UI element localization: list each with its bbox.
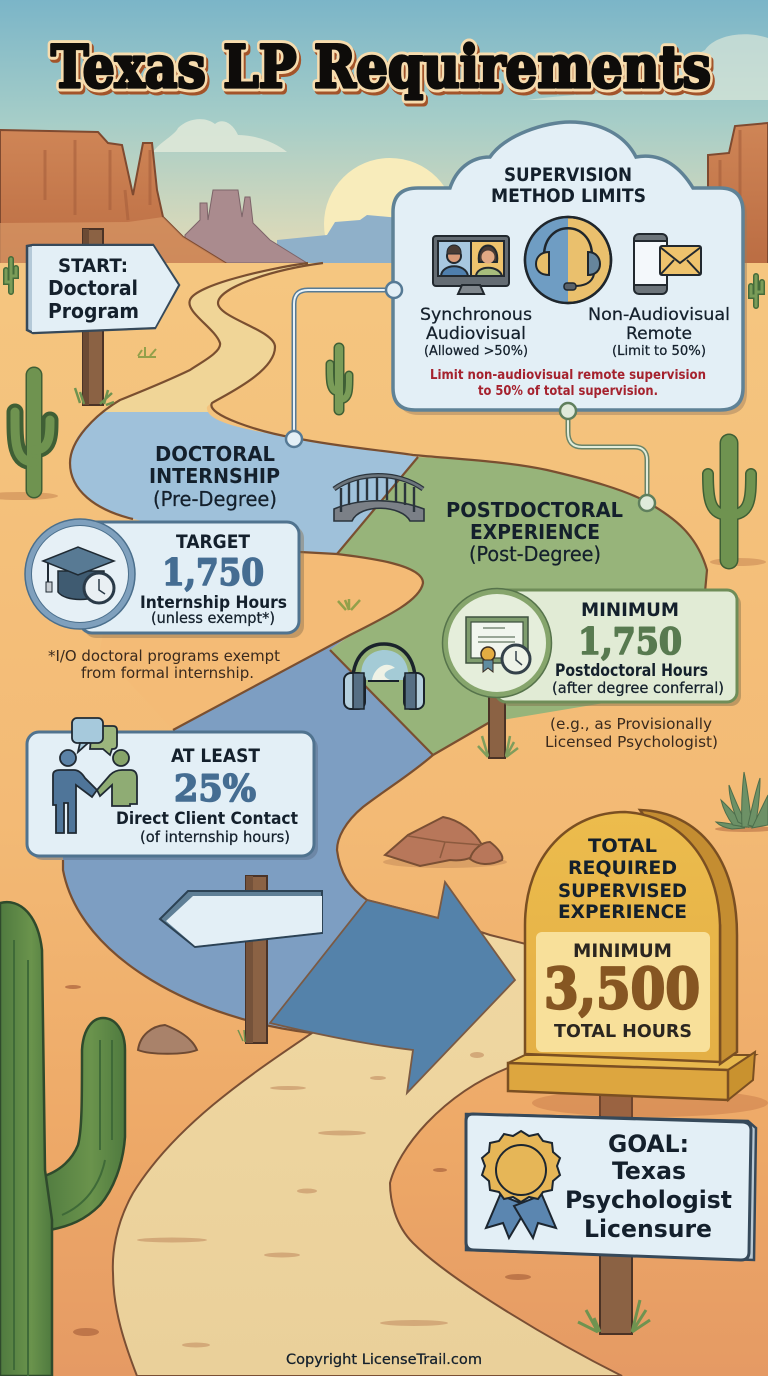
path: upper edge of green: [295, 438, 707, 592]
label: synchronous audiovisual: Synchronous: [420, 305, 532, 325]
path: lower internship section, blue: [63, 635, 433, 1033]
heading: supervision method limits: SUPERVISION: [504, 164, 632, 186]
icon: rock left: [138, 1025, 197, 1054]
label: synchronous audiovisual: (Allowed >50%): [424, 344, 528, 359]
panel: minimum postdoctoral hours: [442, 588, 741, 706]
text: total heading: [558, 835, 687, 923]
text: target stat: [140, 531, 287, 627]
connector inner green line: [568, 415, 647, 498]
path: internship section, light blue: [70, 412, 418, 554]
text: contact stat: Direct Client Contact: [116, 809, 298, 829]
heading: doctoral internship: (Pre-Degree): [153, 487, 277, 511]
path: orange sand patch: [100, 540, 423, 730]
background: setting sun: [324, 158, 456, 290]
icon: agave plant: [715, 772, 768, 832]
connector: supervision to postdoctoral: [568, 415, 647, 498]
text: goal: GOAL:: [608, 1130, 689, 1158]
background: left mesa: [0, 130, 227, 264]
heading: supervision method limits: METHOD LIMITS: [491, 185, 646, 207]
icon: grass tuft near start: [138, 347, 156, 357]
heading: postdoctoral experience: [446, 498, 623, 566]
callout: non-audiovisual limit: to 50% of total supervision.: [478, 384, 658, 399]
panel: 3,500 total hours: TOTAL HOURS: [554, 1021, 692, 1042]
sign: start doctoral program: START:: [58, 255, 128, 277]
panel: total required supervised experience: [508, 810, 768, 1117]
sign post: postdoctoral badge: [489, 690, 505, 758]
heading: doctoral internship: [149, 442, 280, 511]
background: central mesa: [185, 190, 307, 263]
text: goal: [565, 1130, 732, 1243]
text: postdoctoral stat: [552, 599, 724, 697]
icon: certificate with clock: [442, 588, 552, 698]
text: contact stat: (of internship hours): [140, 828, 290, 846]
connector dot: doctoral internship: [286, 431, 302, 447]
icon: bridge: [334, 475, 424, 521]
panel: direct client contact: [27, 718, 318, 860]
icon: award ribbon: [482, 1131, 560, 1238]
connector dot: postdoctoral: [639, 495, 655, 511]
background: desert sky: [0, 0, 768, 265]
path: lower sandy road: [113, 900, 622, 1376]
text: total heading: REQUIRED: [568, 857, 677, 879]
icon: small cactus far left: [6, 259, 16, 292]
heading: doctoral internship: DOCTORAL: [155, 442, 275, 466]
icon: grass at start post: [75, 388, 114, 405]
panel: 3,500 total hours: MINIMUM: [573, 940, 672, 962]
arrow: path toward total: [270, 882, 515, 1093]
icon: grass at arrow post: [238, 1030, 245, 1042]
panel: goal sign: [466, 1114, 756, 1260]
text: total heading: TOTAL: [588, 835, 657, 857]
sign post: start: [83, 229, 103, 405]
sign: start doctoral program: Doctoral: [48, 276, 138, 300]
footnote: I/O exemption: *I/O doctoral programs exempt: [48, 647, 280, 665]
note: provisionally licensed: (e.g., as Provisionally: [550, 715, 712, 733]
icon: grass tuft: [338, 599, 360, 610]
callout: non-audiovisual limit: Limit non-audiovisual remote supervision: [430, 368, 706, 383]
text: target stat: TARGET: [176, 531, 250, 553]
text: contact stat: [116, 745, 298, 846]
text: goal: Texas: [612, 1157, 686, 1185]
icon: cactus right: [708, 443, 766, 566]
sign: start doctoral program: Program: [48, 299, 139, 323]
heading: postdoctoral experience: POSTDOCTORAL: [446, 498, 623, 522]
text: target stat: (unless exempt*): [151, 609, 275, 627]
text: postdoctoral stat: (after degree conferral): [552, 679, 724, 697]
icon: rocks center: [383, 817, 507, 868]
path: winding upper road: [103, 263, 323, 412]
heading: postdoctoral experience: (Post-Degree): [469, 542, 601, 566]
label: synchronous audiovisual: Audiovisual: [426, 324, 526, 344]
text: target stat: 1,750: [162, 552, 264, 594]
icon: video call monitor: [433, 236, 509, 294]
text: postdoctoral stat: 1,750: [578, 621, 682, 663]
footnote: I/O exemption: [48, 647, 280, 682]
text: total heading: EXPERIENCE: [558, 901, 687, 923]
icon: small cactus far right: [751, 276, 762, 306]
path: postdoctoral section, green: [330, 457, 707, 755]
icon: cactus left: [0, 375, 58, 500]
heading: supervision method limits: [491, 164, 646, 207]
icon: graduation cap with clock: [25, 519, 135, 629]
background: clouds: [153, 34, 768, 152]
text: contact stat: 25%: [174, 768, 256, 810]
text: target stat: Internship Hours: [140, 593, 287, 613]
note: provisionally licensed: Licensed Psychologist): [545, 733, 718, 751]
text: total heading: SUPERVISED: [558, 880, 687, 902]
text: postdoctoral stat: MINIMUM: [581, 599, 679, 621]
background: road marks and pebbles: [65, 985, 531, 1348]
note: provisionally licensed: [545, 715, 718, 751]
icon: phone and envelope: [634, 234, 701, 294]
background: distant blue hills: [277, 215, 400, 264]
background: right mesa: [708, 123, 768, 264]
path: road edges: [70, 263, 323, 519]
label: non-audiovisual remote: Non-Audiovisual: [588, 305, 730, 325]
heading: doctoral internship: INTERNSHIP: [149, 464, 280, 488]
connector dot: supervision bottom: [560, 403, 576, 419]
icon: headphones on path: [344, 644, 424, 709]
text: postdoctoral stat: Postdoctoral Hours: [555, 661, 708, 681]
text: contact stat: AT LEAST: [171, 745, 260, 767]
label: non-audiovisual remote: (Limit to 50%): [612, 344, 706, 359]
callout: non-audiovisual limit: [430, 368, 706, 399]
icon: grass at goal post: [578, 1300, 650, 1332]
connector: audiovisual to doctoral internship: [294, 290, 388, 434]
icon: handshake with speech bubbles: [53, 718, 137, 833]
icon: big foreground cactus: [0, 902, 125, 1376]
icon: headset circle: [525, 217, 611, 303]
sign post: goal: [600, 1092, 632, 1334]
sign: start doctoral program: [27, 245, 179, 333]
panel: target internship hours: [25, 519, 304, 638]
text: goal: Licensure: [584, 1215, 712, 1243]
sign: blank arrow: [160, 891, 322, 947]
footnote: I/O exemption: from formal internship.: [81, 664, 254, 682]
label: non-audiovisual remote: [588, 305, 730, 359]
path: blue and patch edges: [63, 552, 490, 1033]
panel: supervision method limits: [393, 122, 747, 415]
heading: postdoctoral experience: EXPERIENCE: [470, 520, 600, 544]
label: non-audiovisual remote: Remote: [626, 324, 692, 344]
label: synchronous audiovisual: [420, 305, 532, 359]
icon: grass at postdoc post: [478, 736, 518, 757]
panel: 3,500 total hours: [536, 932, 710, 1052]
icon: cactus center: [330, 348, 349, 410]
connector inner line: [294, 290, 388, 434]
sign post: blank arrow: [246, 876, 267, 1043]
panel: 3,500 total hours: 3,500: [544, 956, 700, 1022]
connector dot: supervision left: [386, 282, 402, 298]
text: goal: Psychologist: [565, 1186, 732, 1214]
copyright: Copyright LicenseTrail.com: [286, 1352, 482, 1368]
